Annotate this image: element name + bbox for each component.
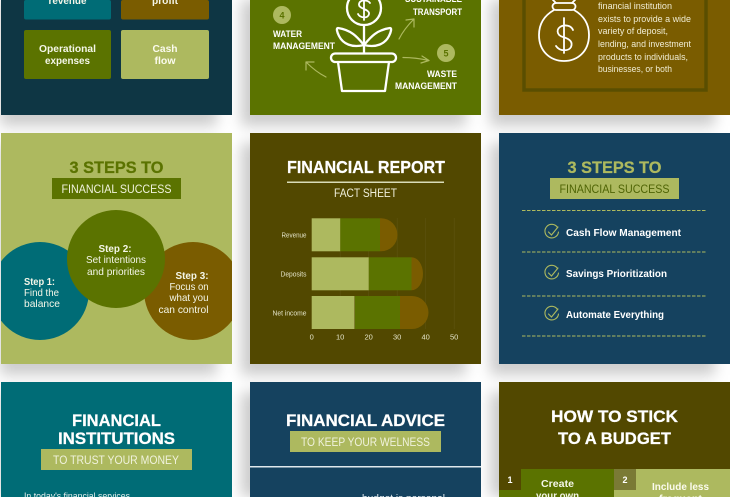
text: step 3	[158, 270, 209, 316]
heading: FINANCIAL	[72, 411, 161, 430]
tile: cash flow	[121, 30, 209, 79]
text: definition: businesses, or both	[598, 64, 672, 74]
panel: financial institution definition	[499, 0, 730, 115]
banner	[52, 178, 181, 199]
text: step 1: Find the	[24, 287, 59, 299]
text: definition	[598, 1, 691, 74]
banner	[290, 431, 441, 452]
panel: financial report	[250, 133, 481, 364]
tile: cash flow: flow	[154, 55, 176, 67]
tile: operational expenses	[24, 30, 111, 79]
icon: money bag	[539, 0, 589, 61]
text: step 3: what you	[169, 292, 209, 304]
panel: 3 steps checklist	[499, 133, 730, 364]
tile: profit	[121, 0, 209, 20]
banner	[550, 178, 679, 199]
text: definition: lending, and investment	[598, 39, 691, 49]
text: step 2	[86, 243, 146, 278]
item: savings prioritization	[545, 265, 667, 280]
item: automate everything: Automate Everything	[566, 310, 664, 321]
banner: FINANCIAL SUCCESS	[560, 184, 670, 196]
heading: INSTITUTIONS	[58, 429, 175, 448]
frame	[524, 0, 706, 90]
category labels: Deposits	[280, 270, 307, 278]
banner	[41, 449, 192, 470]
step 1	[499, 469, 614, 497]
subheading: FACT SHEET	[334, 188, 397, 200]
text: definition: products to individuals,	[598, 52, 688, 62]
item: cash flow management	[545, 224, 682, 239]
heading: HOW TO STICK	[551, 407, 679, 426]
step 1: 1	[507, 475, 513, 485]
step 2	[614, 469, 730, 497]
icon: number 4	[273, 6, 291, 24]
text: sustainable transport	[405, 0, 462, 17]
panel: financial advice	[250, 382, 481, 497]
heading	[551, 407, 679, 448]
icon: number 4: 4	[279, 10, 285, 20]
category labels: Net income	[272, 308, 306, 318]
heading: 3 STEPS TO	[568, 158, 662, 177]
axis labels: 20	[365, 332, 373, 342]
text: definition: financial institution	[598, 1, 672, 11]
circles	[0, 210, 242, 340]
text: definition: variety of deposit,	[598, 26, 668, 36]
text: water management: WATER	[273, 29, 302, 39]
axis labels: 30	[393, 332, 401, 342]
item: savings prioritization: Savings Prioritization	[566, 269, 667, 280]
icon: number 5	[437, 44, 455, 62]
icon: money plant in pot	[331, 0, 396, 91]
icon: number 5: 5	[443, 48, 449, 58]
text: waste management: WASTE	[427, 69, 457, 79]
heading: FINANCIAL ADVICE	[286, 411, 445, 430]
axis labels: 50	[450, 332, 458, 342]
text: step 3: can control	[158, 304, 208, 316]
panel: sustainability plant	[250, 0, 481, 115]
axis labels: 40	[422, 332, 430, 342]
text: step 3: Step 3:	[176, 270, 208, 282]
bar: deposits	[312, 257, 423, 290]
panel: financial institutions	[1, 382, 232, 497]
banner: FINANCIAL SUCCESS	[62, 184, 172, 196]
text: waste management: MANAGEMENT	[395, 81, 457, 91]
text: water management	[273, 29, 335, 51]
text: step 1: balance	[24, 298, 60, 310]
category labels: Revenue	[282, 230, 306, 240]
text: step 1: Step 1:	[24, 276, 55, 288]
text: step 1	[24, 276, 60, 310]
bar chart	[272, 218, 458, 342]
text: definition: exists to provide a wide	[598, 14, 691, 24]
text: sustainable transport: TRANSPORT	[413, 7, 462, 17]
tile: revenue	[24, 0, 111, 20]
heading: 3 STEPS TO	[70, 158, 164, 177]
text: water management: MANAGEMENT	[273, 41, 335, 51]
panel: financial metrics tiles	[1, 0, 232, 115]
axis labels: 10	[336, 332, 344, 342]
tile: operational expenses: Operational	[39, 43, 96, 55]
bar: net income	[312, 296, 429, 329]
heading	[58, 411, 175, 448]
category labels	[272, 230, 307, 318]
step 1: Create	[541, 478, 574, 490]
text: step 2: Set intentions	[86, 254, 146, 266]
banner: TO TRUST YOUR MONEY	[53, 455, 179, 467]
step 2: 2	[622, 475, 628, 485]
heading: FINANCIAL REPORT	[287, 157, 445, 177]
step 2: Include less	[652, 481, 709, 493]
axis labels: 0	[310, 332, 314, 342]
tile: cash flow: Cash	[152, 43, 178, 55]
text: step 2: and priorities	[87, 266, 145, 278]
axis labels	[310, 332, 458, 342]
banner: TO KEEP YOUR WELNESS	[301, 437, 430, 449]
tile: operational expenses: expenses	[45, 55, 90, 67]
heading: TO A BUDGET	[558, 429, 672, 448]
panel: 3 steps circles	[0, 133, 242, 364]
text: waste management	[395, 69, 457, 91]
bar: revenue	[312, 218, 398, 251]
panel: how to stick to a budget	[499, 382, 730, 497]
item: cash flow management: Cash Flow Management	[566, 228, 682, 239]
item: automate everything	[545, 306, 664, 321]
text: step 2: Step 2:	[98, 243, 132, 255]
text: step 3: Focus on	[170, 281, 209, 293]
arrows	[306, 19, 429, 77]
